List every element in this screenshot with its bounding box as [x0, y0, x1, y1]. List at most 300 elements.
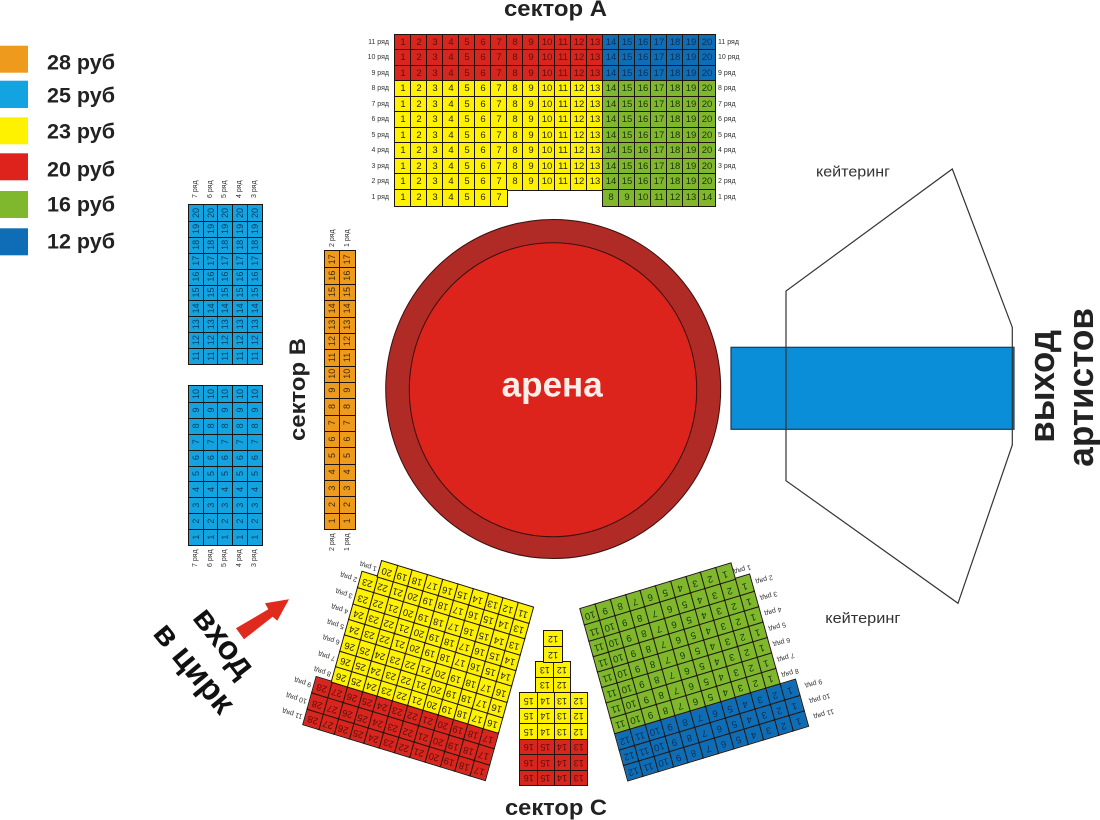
sector C right green seats: 9 — [633, 662, 641, 675]
sector A yellow seats: 3 — [432, 192, 438, 203]
sector A yellow seats: 6 — [480, 192, 486, 203]
sector A row labels left: 1 ряд — [371, 194, 389, 201]
sector A row labels left — [368, 38, 389, 201]
sector B lower seats: 5 — [191, 471, 201, 476]
sector C centre red seats: 13 — [574, 758, 584, 768]
sector B orange seats: 7 — [327, 420, 337, 425]
sector A dark blue seats: 15 — [622, 52, 632, 63]
sector A green seats: 16 — [638, 176, 648, 187]
sector B upper seats: 19 — [205, 224, 215, 234]
sector C right green seats: 8 — [652, 673, 660, 686]
sector C left yellow seats: 19 — [421, 594, 434, 608]
sector B lower seats: 1 — [249, 535, 259, 540]
sector A red seats: 12 — [574, 52, 584, 63]
panel: sector C right block: 1 ряд — [733, 563, 751, 575]
sector B upper seats: 19 — [220, 224, 230, 234]
sector C left yellow seats: 22 — [400, 673, 413, 687]
sector B orange seats: 6 — [327, 437, 337, 442]
sector A green seats: 16 — [638, 114, 648, 125]
sector A yellow seats: 5 — [464, 161, 470, 172]
sector B orange seats: 14 — [327, 303, 337, 313]
sector B lower seats: 9 — [249, 407, 259, 412]
sector A yellow seats: 10 — [542, 130, 552, 141]
sector C right green seats: 11 — [592, 640, 605, 653]
sector A yellow seats: 8 — [512, 99, 518, 110]
sector C right green seats: 7 — [654, 622, 662, 634]
sector B lower seats: 6 — [191, 455, 201, 460]
sector B lower seats: 5 — [235, 471, 245, 476]
sector B upper seats: 11 — [220, 351, 230, 361]
sector B orange seats: 5 — [342, 453, 352, 458]
sector A dark blue seats: 17 — [654, 68, 664, 79]
sector A red seats: 3 — [432, 52, 438, 63]
sector A red seats: 10 — [542, 52, 552, 63]
label: entrance: в цирк — [146, 615, 243, 721]
sector B orange seats — [324, 250, 356, 530]
sector A green seats: 15 — [622, 176, 632, 187]
sector C left yellow seats: 16 — [441, 583, 454, 597]
sector A dark blue seats: 16 — [638, 68, 648, 79]
sector A dark blue seats: 20 — [702, 68, 712, 79]
sector C right green seats: 1 — [757, 642, 766, 654]
sector C right green seats: 11 — [601, 671, 613, 684]
sector A dark blue seats: 20 — [702, 52, 712, 63]
sector C centre yellow seats wide: 15 — [524, 727, 534, 737]
sector C left yellow seats: 15 — [456, 588, 469, 602]
sector A yellow seats: 2 — [416, 114, 422, 125]
sector A dark blue seats: 14 — [606, 68, 616, 79]
sector A yellow seats: 6 — [480, 130, 486, 141]
sector A green seats: 14 — [606, 130, 616, 141]
sector C right green seats: 5 — [697, 660, 705, 672]
sector C centre red seats: 14 — [557, 742, 567, 752]
sector A dark blue seats: 17 — [654, 52, 664, 63]
sector B upper seats: 17 — [191, 256, 201, 266]
sector A row labels left: 6 ряд — [371, 116, 389, 123]
sector B lower row labels: 7 ряд — [192, 549, 199, 567]
sector C centre red seats — [519, 740, 588, 786]
sector B upper seats: 18 — [235, 240, 245, 250]
sector C left yellow seats: 14 — [471, 593, 484, 606]
sector B upper seats: 13 — [220, 319, 230, 329]
sector A row labels right: 10 ряд — [718, 54, 739, 61]
sector C left red seats: 22 — [397, 740, 410, 754]
sector A yellow seats: 10 — [542, 161, 552, 172]
sector B orange seats: 4 — [327, 469, 337, 474]
sector C centre red seats: 16 — [524, 773, 534, 783]
panel: sector C left block: 7 ряд — [318, 650, 336, 661]
sector A yellow seats: 11 — [558, 114, 568, 125]
sector C centre yellow seats top: 12 — [548, 650, 558, 660]
sector C right dark blue seats: 2 — [775, 704, 783, 716]
sector A yellow seats: 9 — [528, 176, 534, 187]
sector C left yellow seats: 20 — [434, 666, 447, 680]
sector C right green seats: 6 — [678, 649, 686, 661]
sector B lower seats: 4 — [220, 487, 230, 492]
sector C right green seats: 7 — [667, 669, 675, 681]
sector A yellow seats: 5 — [464, 145, 470, 156]
sector C right green seats: 9 — [620, 616, 628, 628]
sector C left red seats: 19 — [451, 723, 464, 737]
sector C left yellow seats: 16 — [467, 608, 480, 622]
sector A row labels right: 5 ряд — [718, 132, 736, 139]
sector C right dark blue seats: 7 — [700, 727, 708, 739]
sector C right green seats: 1 — [766, 673, 774, 685]
price legend: 25 руб — [47, 84, 115, 108]
sector A dark blue seats: 16 — [638, 36, 648, 48]
sector A yellow seats: 13 — [590, 114, 600, 125]
sector A red seats: 5 — [464, 36, 470, 48]
sector A yellow seats: 13 — [590, 145, 600, 156]
sector C right green seats: 11 — [605, 686, 618, 700]
sector C left red seats: 18 — [467, 728, 480, 741]
text: 10 ряд — [808, 691, 830, 704]
sector C right dark blue seats: 5 — [725, 702, 733, 714]
sector A dark blue seats: 15 — [622, 68, 632, 79]
sector A green seats: 20 — [702, 114, 712, 125]
sector A yellow seats: 3 — [432, 176, 438, 187]
sector A yellow seats: 5 — [464, 192, 470, 203]
sector C right green seats: 8 — [616, 600, 624, 612]
sector C right green seats: 4 — [717, 671, 725, 683]
text: 9 ряд — [804, 677, 822, 689]
sector A red seats: 9 — [528, 68, 534, 79]
sector C left red seats: 24 — [376, 700, 389, 713]
sector C right green seats: 3 — [719, 620, 727, 632]
sector A red seats: 1 — [400, 52, 406, 63]
sector A green seats: 14 — [606, 176, 616, 187]
sector B upper seats: 19 — [249, 224, 259, 234]
sector A yellow seats: 7 — [496, 83, 502, 94]
sector A row labels right: 2 ряд — [718, 178, 736, 185]
sector A yellow seats: 6 — [480, 176, 486, 187]
sector B upper seats: 14 — [249, 303, 259, 313]
sector C left yellow seats: 15 — [478, 629, 491, 642]
panel: sector C right block: 2 ряд — [755, 574, 773, 585]
sector B lower seats: 2 — [191, 519, 201, 524]
sector A yellow seats: 2 — [416, 161, 422, 172]
sector A row labels left: 3 ряд — [371, 163, 389, 170]
sector A green seats: 20 — [702, 130, 712, 141]
label: catering top: кейтеринг — [816, 165, 890, 181]
sector C left yellow seats: 21 — [387, 601, 400, 615]
sector B lower seats: 3 — [191, 503, 201, 508]
sector A yellow seats: 1 — [400, 99, 406, 110]
sector B lower row labels: 4 ряд — [236, 549, 243, 567]
sector C left red seats: 28 — [315, 681, 328, 695]
sector A yellow seats: 2 — [416, 99, 422, 110]
sector A green seats: 14 — [606, 83, 616, 94]
sector C centre red seats: 15 — [541, 758, 551, 768]
label: artist exit: выход — [1021, 330, 1062, 443]
sector A yellow seats: 11 — [558, 130, 568, 141]
sector C left red seats: 19 — [443, 754, 456, 768]
sector C right dark blue seats: 11 — [638, 744, 650, 758]
sector B lower seats: 10 — [205, 389, 215, 399]
sector B lower seats: 8 — [205, 423, 215, 428]
sector B lower seats: 6 — [249, 455, 259, 460]
sector C centre yellow seats wide: 12 — [574, 696, 584, 706]
sector C left yellow seats: 14 — [497, 618, 510, 631]
sector C right dark blue seats: 3 — [755, 693, 764, 705]
sector C right green seats: 3 — [710, 589, 718, 601]
sector A green seats: 20 — [702, 176, 712, 187]
sector C centre yellow seats middle: 13 — [540, 665, 550, 675]
panel: sector C right block — [579, 562, 834, 782]
sector C left red seats: 27 — [326, 702, 339, 715]
sector B upper seats: 11 — [249, 351, 259, 361]
sector A yellow seats: 9 — [528, 161, 534, 172]
sector C left red seats: 24 — [371, 715, 384, 729]
sector C centre red seats: 14 — [557, 758, 567, 768]
sector C right green seats: 6 — [674, 633, 682, 645]
sector C centre yellow seats wide: 15 — [524, 711, 534, 721]
sector A green seats: 19 — [686, 83, 696, 94]
sector C right dark blue seats: 12 — [627, 764, 640, 778]
sector C left yellow seats: 21 — [419, 662, 432, 676]
sector B lower row labels: 6 ряд — [206, 549, 213, 567]
sector C left red seats: 22 — [406, 709, 419, 723]
sector A dark blue seats: 18 — [670, 68, 680, 79]
sector C right green seats: 9 — [624, 631, 632, 643]
sector C left yellow seats: 19 — [445, 687, 458, 701]
sector C left yellow seats: 18 — [456, 707, 469, 721]
sector C right dark blue seats: 1 — [786, 684, 794, 696]
sector B lower seats: 8 — [249, 423, 259, 428]
sector B upper seats: 16 — [191, 272, 201, 282]
sector B orange seats: 9 — [342, 388, 352, 393]
sector C right green seats: 7 — [659, 638, 667, 650]
panel: sector C left block — [282, 560, 534, 782]
sector A red seats: 6 — [480, 36, 486, 48]
sector C right dark blue seats: 7 — [695, 711, 703, 723]
panel: sector C right block: 3 ряд — [759, 589, 778, 601]
sector B orange seats: 11 — [342, 353, 352, 362]
sector C centre red seats: 13 — [574, 773, 584, 783]
sector B lower seats: 2 — [205, 519, 215, 524]
sector A red seats: 5 — [464, 68, 470, 79]
sector B lower seats: 1 — [191, 535, 201, 540]
sector C centre yellow seats wide: 14 — [541, 711, 551, 721]
sector C right green seats: 6 — [687, 680, 695, 692]
sector C left yellow seats: 18 — [443, 635, 456, 649]
panel: sector C right block: 6 ряд — [772, 636, 791, 648]
sector C left yellow seats: 17 — [426, 579, 439, 592]
sector C right green seats: 10 — [603, 619, 616, 633]
sector C centre yellow seats wide — [519, 692, 588, 740]
sector B upper seats: 16 — [249, 272, 259, 282]
sector A green seats: 16 — [638, 83, 648, 94]
sector C right dark blue seats: 4 — [740, 697, 748, 710]
sector B upper seats: 14 — [205, 303, 215, 313]
sector A red seats: 2 — [416, 52, 422, 63]
sector C left yellow seats: 18 — [464, 676, 478, 689]
sector C left red seats: 27 — [330, 686, 343, 700]
sector A red seats: 6 — [480, 52, 486, 63]
panel: sector C left block: 2 ряд — [339, 571, 358, 583]
sector B upper seats: 11 — [191, 351, 201, 361]
sector B orange seats: 10 — [342, 369, 352, 379]
sector A red seats: 9 — [528, 52, 534, 63]
sector B upper seats: 12 — [220, 335, 230, 345]
sector A red seats: 8 — [512, 52, 518, 63]
sector A yellow seats: 3 — [432, 145, 438, 156]
sector A yellow seats: 6 — [480, 161, 486, 172]
sector C right green seats: 4 — [712, 655, 720, 667]
sector A yellow seats: 9 — [528, 130, 534, 141]
sector C left yellow seats: 24 — [352, 607, 365, 621]
panel: sector C left block: 6 ряд — [322, 634, 341, 646]
sector B orange seats: 16 — [342, 271, 352, 281]
sector B upper seats: 13 — [191, 319, 201, 329]
sector B orange seats: 15 — [327, 287, 337, 297]
sector A red seats: 4 — [448, 68, 454, 79]
sector B lower seats: 9 — [191, 407, 201, 412]
sector A red seats: 5 — [464, 52, 470, 63]
sector C right green seats: 3 — [691, 578, 699, 590]
sector A red seats: 10 — [542, 36, 552, 48]
sector C centre yellow seats wide: 14 — [541, 727, 551, 737]
sector C right green seats: 11 — [614, 717, 626, 731]
sector A yellow seats: 7 — [496, 145, 502, 156]
sector B upper seats: 19 — [191, 224, 201, 234]
sector C right green seats: 10 — [629, 713, 642, 726]
sector B lower seats: 7 — [205, 439, 215, 444]
sector B lower seats: 2 — [249, 519, 259, 524]
sector A yellow seats: 6 — [480, 99, 486, 110]
sector B lower seats: 1 — [205, 535, 215, 540]
sector A red seats: 4 — [448, 52, 454, 63]
sector A dark blue seats: 18 — [670, 36, 680, 48]
heading: sector B: сектор В — [285, 338, 310, 441]
sector C right dark blue seats: 10 — [657, 755, 670, 769]
sector B upper seats: 17 — [249, 256, 259, 266]
sector C left yellow seats: 16 — [469, 660, 482, 674]
sector C right dark blue seats: 9 — [665, 720, 673, 732]
sector C left yellow seats: 22 — [372, 596, 385, 610]
sector B upper seats: 20 — [205, 208, 215, 218]
sector B upper seats: 19 — [235, 224, 245, 234]
sector A green seats: 18 — [670, 145, 680, 156]
sector C right green seats: 5 — [706, 691, 714, 703]
sector C right dark blue seats: 1 — [790, 699, 798, 712]
sector C left red seats: 17 — [473, 764, 486, 777]
sector C left yellow seats: 13 — [486, 597, 499, 611]
sector C centre yellow seats middle: 13 — [540, 680, 550, 690]
sector A row labels right: 9 ряд — [718, 70, 736, 77]
sector A green seats: 11 — [654, 192, 664, 203]
sector B upper row labels: 5 ряд — [221, 180, 228, 198]
sector A dark blue seats: 17 — [654, 36, 664, 48]
sector A green seats: 16 — [638, 130, 648, 141]
sector C left yellow seats: 22 — [382, 617, 395, 630]
sector C left yellow seats: 24 — [374, 648, 387, 662]
sector B lower seats: 6 — [220, 455, 230, 460]
sector A green seats: 20 — [702, 83, 712, 94]
sector A yellow seats: 12 — [574, 130, 584, 141]
sector A dark blue seats: 19 — [686, 36, 696, 48]
sector C right dark blue seats: 11 — [642, 760, 654, 773]
sector B upper seats: 13 — [235, 319, 245, 329]
sector A yellow seats: 5 — [464, 130, 470, 141]
sector A green seats: 10 — [638, 192, 648, 203]
sector C left yellow seats: 22 — [395, 689, 408, 702]
sector B lower seats: 9 — [205, 407, 215, 412]
heading: sector C: сектор С — [505, 795, 607, 820]
sector B lower seats: 10 — [191, 389, 201, 399]
sector A red seats: 11 — [558, 52, 568, 63]
sector B upper seats: 12 — [235, 335, 245, 345]
sector B upper seats: 12 — [205, 335, 215, 345]
price legend: 28 руб — [47, 50, 115, 74]
sector C centre red seats: 15 — [541, 742, 551, 752]
sector A green seats: 15 — [622, 83, 632, 94]
sector C left yellow seats: 23 — [367, 612, 380, 626]
sector C right dark blue seats: 6 — [710, 707, 718, 719]
sector C right green seats: 1 — [740, 579, 748, 592]
sector A row labels left: 9 ряд — [371, 70, 389, 77]
sector C left yellow seats: 23 — [384, 668, 398, 682]
sector C right green seats: 4 — [708, 640, 716, 652]
sector C left yellow seats: 14 — [499, 669, 512, 683]
sector B lower seats: 9 — [235, 407, 245, 412]
sector A green seats: 20 — [702, 145, 712, 156]
label: catering bottom: кейтеринг — [825, 611, 900, 627]
sector B orange labels top: 2 ряд — [329, 229, 336, 247]
sector C right green seats: 3 — [732, 666, 740, 678]
sector C right dark blue seats: 6 — [715, 722, 723, 734]
sector A yellow seats: 8 — [512, 145, 518, 156]
sector A yellow seats: 4 — [448, 99, 454, 110]
sector B orange seats: 11 — [327, 353, 337, 362]
arena: арена — [502, 366, 603, 405]
sector C left yellow seats: 19 — [417, 610, 430, 624]
sector B upper seats — [188, 204, 263, 365]
sector C left yellow seats: 19 — [449, 671, 462, 685]
sector A yellow seats: 12 — [574, 176, 584, 187]
sector B upper seats: 20 — [220, 208, 230, 218]
sector A yellow seats: 7 — [496, 176, 502, 187]
sector C left yellow seats: 12 — [501, 602, 515, 616]
sector C centre yellow seats middle — [535, 661, 571, 692]
sector C left yellow seats: 16 — [490, 701, 503, 714]
sector C left red seats: 26 — [337, 722, 350, 736]
sector A yellow seats: 1 — [400, 145, 406, 156]
sector B upper seats: 11 — [235, 351, 245, 361]
price legend: 20 руб — [47, 158, 115, 182]
sector C left red seats: 26 — [345, 690, 359, 704]
sector C left yellow seats: 24 — [365, 679, 378, 693]
sector B lower seats: 5 — [220, 471, 230, 476]
sector A red seats: 13 — [590, 36, 600, 48]
sector A red seats: 12 — [574, 68, 584, 79]
sector A row labels left: 7 ряд — [371, 101, 389, 108]
sector C left yellow seats: 25 — [359, 643, 372, 657]
sector A row labels right: 1 ряд — [718, 194, 736, 201]
sector A green seats: 19 — [686, 161, 696, 172]
sector C centre yellow seats middle: 12 — [557, 665, 567, 675]
sector B lower seats: 1 — [235, 535, 245, 540]
sector B lower seats: 7 — [191, 439, 201, 444]
sector C left red seats: 20 — [428, 750, 441, 763]
sector B orange seats: 2 — [342, 502, 352, 507]
sector A green seats: 15 — [622, 145, 632, 156]
sector A green seats — [602, 80, 716, 207]
sector B upper seats: 17 — [220, 256, 230, 266]
sector A yellow seats: 4 — [448, 114, 454, 125]
sector A green seats: 15 — [622, 161, 632, 172]
sector C right green seats: 6 — [669, 618, 677, 630]
